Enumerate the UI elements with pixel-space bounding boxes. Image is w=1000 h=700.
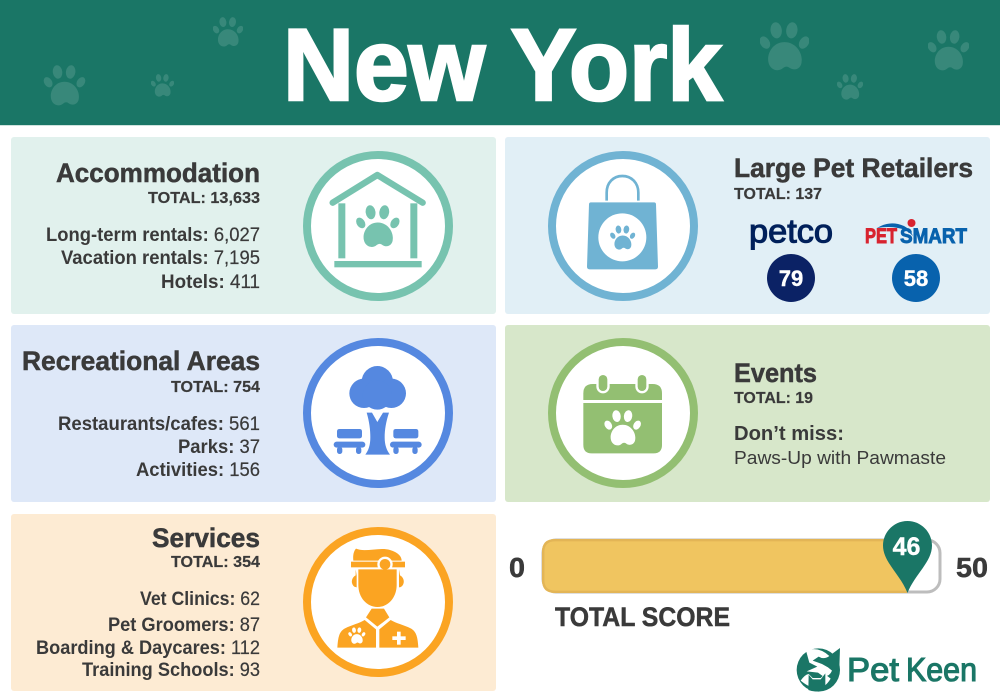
recreational breakdown: Restaurants/cafes: 561 [58,413,260,435]
services breakdown: Vet Clinics: 62 [140,588,260,610]
logo: pet keen: Pet [847,651,899,688]
logo: pet keen: Keen [906,651,977,688]
accommodation breakdown: Vacation rentals: 7,195 [61,247,260,269]
recreational breakdown: Parks: 37 [178,436,260,458]
total: accommodation: TOTAL: 13,633 [148,190,260,207]
services breakdown: Boarding & Daycares: 112 [36,637,260,659]
panel: recreational areas [11,325,496,502]
total score label: TOTAL SCORE [555,602,730,632]
total: retailers: TOTAL: 137 [734,186,822,203]
icon: calendar [552,342,694,484]
logo: petsmart: PET [865,225,897,248]
total: recreational areas: TOTAL: 754 [171,379,260,396]
heading: services: Services [152,523,260,553]
heading: large pet retailers: Large Pet Retailers [734,153,973,183]
score scale maximum: 50 [956,552,988,583]
total: services: TOTAL: 354 [171,554,260,571]
icon: pet house [307,155,449,297]
accommodation breakdown: Hotels: 411 [161,271,260,293]
total: events: TOTAL: 19 [734,390,813,407]
logo: pet keen [797,648,977,692]
recreational breakdown [58,413,260,481]
services breakdown: Pet Groomers: 87 [108,614,260,636]
heading: accommodation: Accommodation [56,158,260,188]
badge: petco count [767,254,815,302]
score bar [542,539,940,593]
accommodation breakdown: Long-term rentals: 6,027 [46,224,260,246]
badge: petsmart count [892,254,940,302]
header banner [0,0,1000,126]
badge: petco count: 79 [779,266,803,291]
score scale minimum: 0 [509,552,525,583]
badge: petsmart count: 58 [904,266,928,291]
don't miss label: Don’t miss: [734,423,844,445]
logo: petsmart [865,219,967,248]
panel: accommodation [11,137,496,314]
title: New York [283,8,722,122]
panel: services [11,514,496,691]
heading: recreational areas: Recreational Areas [22,346,260,376]
icon: tree and benches [307,342,449,484]
score pin [883,521,932,593]
icon: shopping bag [552,155,694,297]
panel: large pet retailers [505,137,990,314]
heading: events: Events [734,358,817,388]
icon: veterinarian [307,531,449,673]
logo: petco: petco [749,212,833,250]
accommodation breakdown [46,224,260,293]
panel: events [505,325,990,502]
logo: petsmart: SMART [900,225,967,248]
services breakdown [36,588,260,681]
featured event: Paws-Up with Pawmaste [734,448,946,468]
score pin: 46 [893,533,920,561]
recreational breakdown: Activities: 156 [136,459,260,481]
services breakdown: Training Schools: 93 [82,659,260,681]
